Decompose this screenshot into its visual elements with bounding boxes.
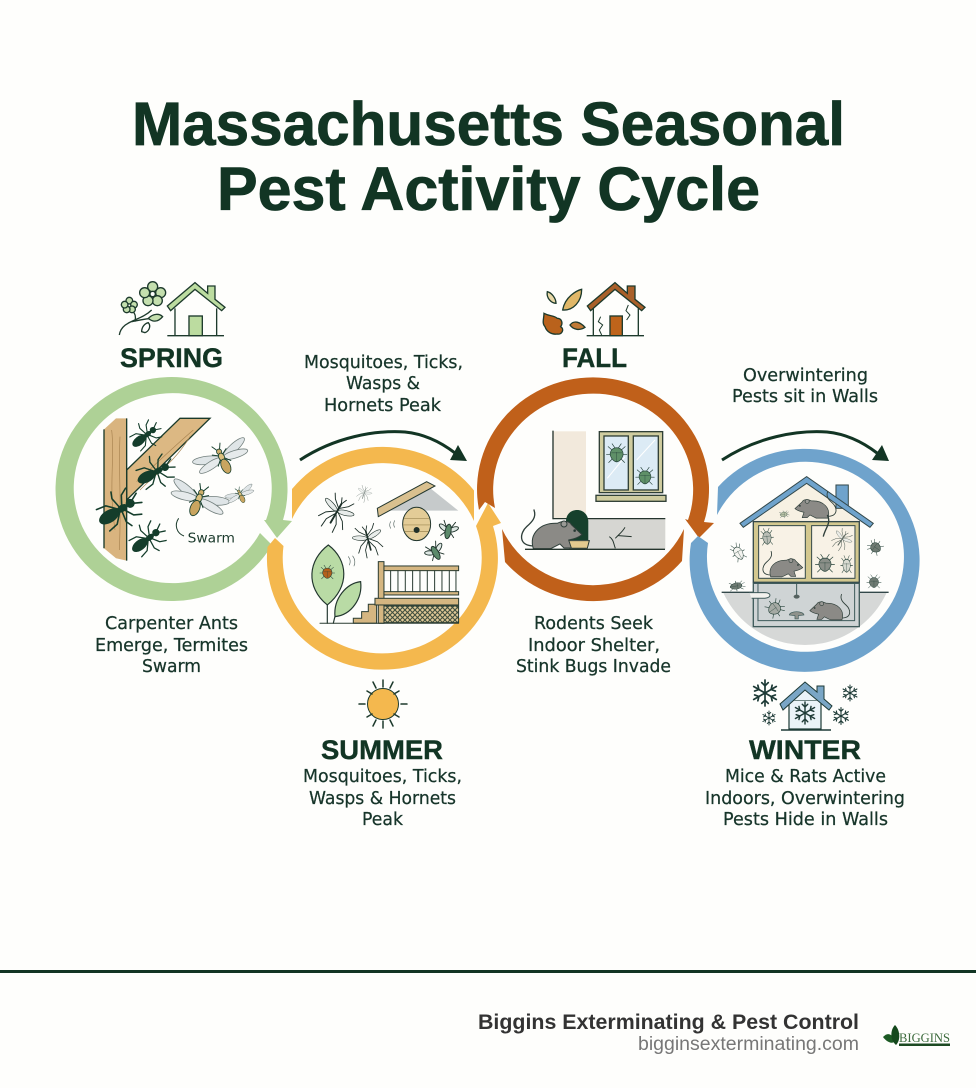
overwintering bugs [760,528,774,545]
text: spring caption: Emerge, Termites [95,635,248,656]
text: summer caption: Wasps & Hornets [309,788,456,809]
illustration: fall rodent and stink bugs [522,431,666,549]
ring: spring [56,377,292,601]
text: summer caption: Peak [362,809,404,830]
text: winter caption: Pests Hide in Walls [723,809,888,830]
text: spring caption [95,613,248,677]
walls and rooms [753,522,859,582]
text: winter caption: Indoors, Overwintering [705,788,905,809]
heading: winter: WINTER [749,735,861,765]
heading: spring: SPRING [120,343,223,373]
text: summer caption: Mosquitoes, Ticks, [303,766,462,787]
icon: fall leaves and house [543,283,645,336]
illustration: spring ants and termites [89,415,258,563]
footer: company name: Biggins Exterminating & Pest Control [478,1011,859,1034]
text: summer transition label: Mosquitoes, Ticks, [304,352,463,373]
ring: winter [690,449,920,672]
title: Massachusetts Seasonal [132,90,845,158]
roof and hive [387,487,458,511]
text: winter caption: Mice & Rats Active [725,766,886,787]
text: summer caption [303,766,462,830]
text: winter transition label: Pests sit in Walls [732,386,878,407]
deck [320,562,459,623]
text: winter transition label: Overwintering [743,365,868,386]
logo [883,1025,950,1046]
ground [724,593,886,645]
text: spring caption: Carpenter Ants [105,613,238,634]
text: summer transition label: Hornets Peak [324,395,442,416]
text: fall caption: Stink Bugs Invade [516,656,671,677]
heading: fall: FALL [562,343,627,373]
interior wall [553,431,586,519]
leaves and tick [312,545,361,623]
illustration: spring ants and termites: Swarm [188,532,235,547]
icon: winter house and snowflakes [754,680,857,730]
illustration: summer yard [312,482,460,623]
window with stink bugs [596,432,666,501]
swarm label [176,518,184,536]
chimney [836,485,848,508]
footer: website: bigginsexterminating.com [638,1034,859,1055]
attic [753,483,860,522]
text: spring caption: Swarm [142,656,201,677]
crack and floor [609,527,632,548]
pipe [749,593,770,598]
text: winter transition label [732,365,878,407]
illustration: winter house cross-section [722,476,889,645]
arrow: spring to fall over summer [300,432,467,461]
text: fall caption: Indoor Shelter, [528,635,660,656]
roof [740,477,873,527]
footer rule [0,970,976,973]
text: summer transition label [304,352,463,416]
rats [763,492,850,620]
food dish [567,541,589,548]
icon: sun [359,680,407,728]
title [132,90,845,223]
rat [522,510,582,549]
text: fall caption [516,613,671,677]
text: summer transition label: Wasps & [346,373,420,394]
ants [124,415,167,457]
ring: fall [477,377,714,601]
ring: summer [267,447,501,670]
mouse hole [566,510,588,540]
heading: summer: SUMMER [321,735,443,765]
arrow: fall to winter [722,432,889,461]
title: Pest Activity Cycle [217,155,760,223]
text: fall caption: Rodents Seek [534,613,654,634]
text: winter caption [705,766,905,830]
wasps [436,519,460,540]
icon: spring flowers and house [119,282,225,336]
logo: BIGGINS [899,1030,950,1045]
basement [753,583,859,627]
wooden post and beam [104,418,210,561]
baseboard [588,518,665,549]
mosquitoes [312,490,359,538]
swarming termites [189,432,256,486]
